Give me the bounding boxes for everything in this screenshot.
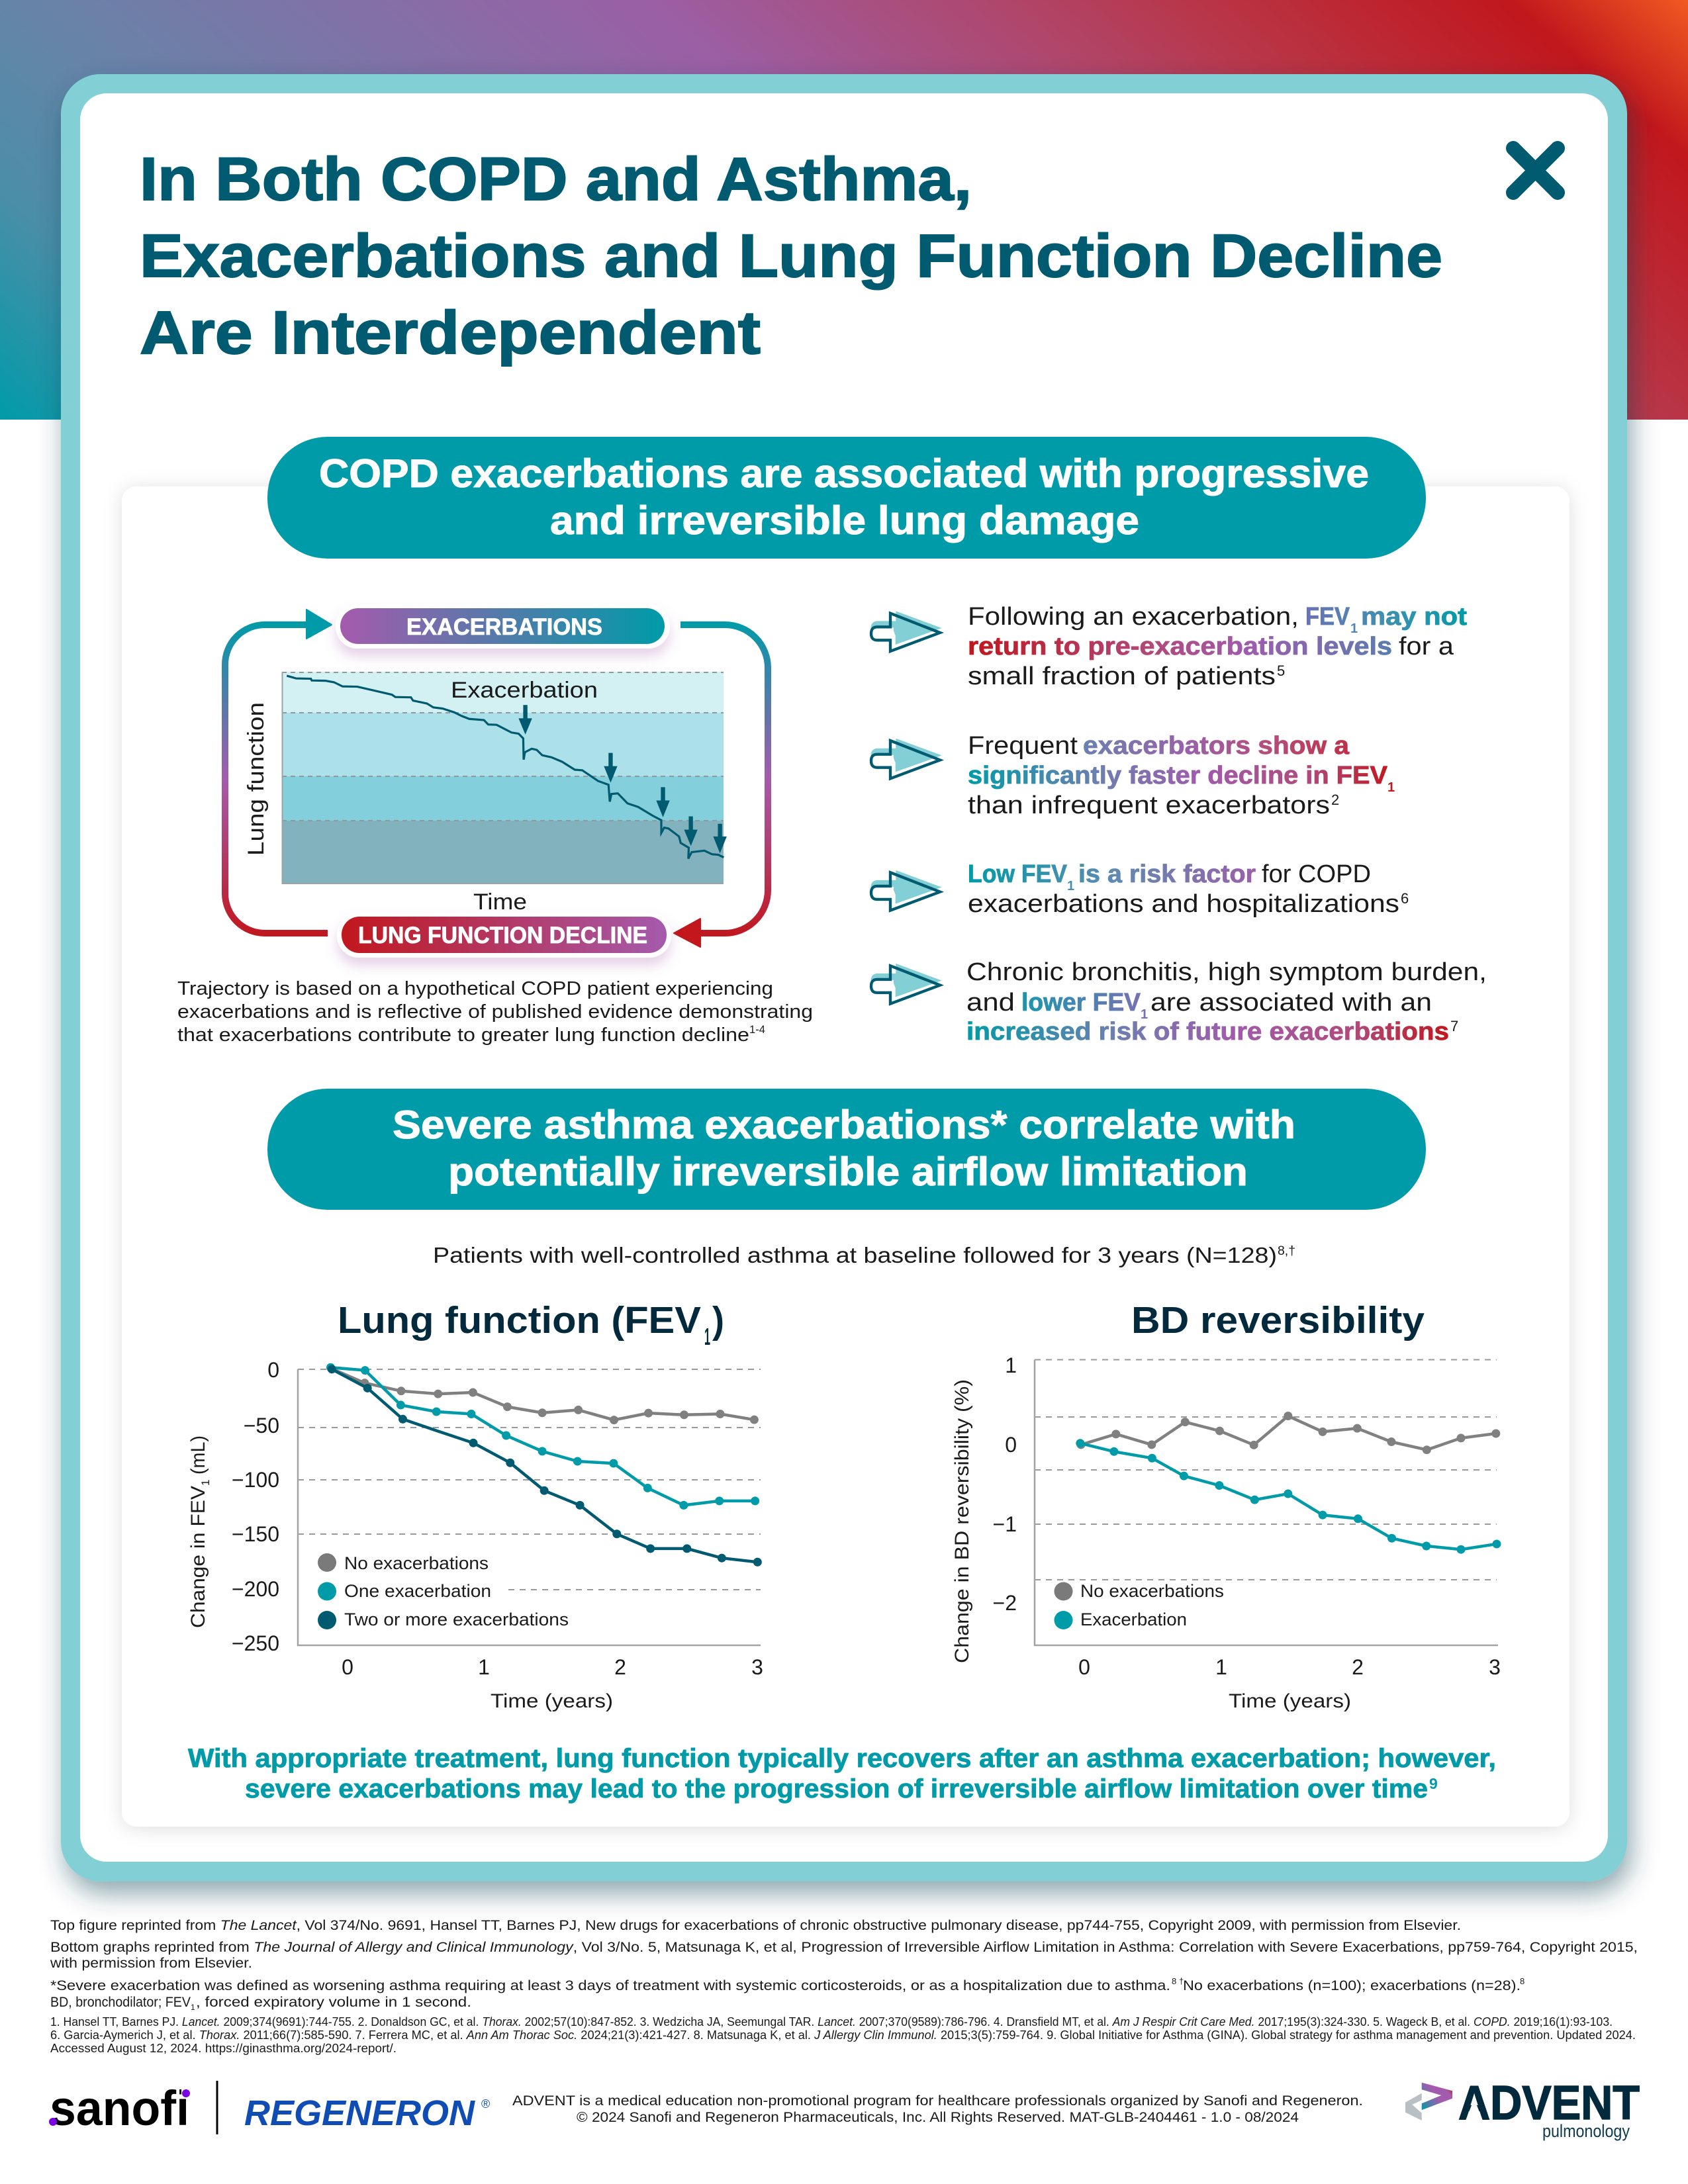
y-axis label: Change in BD reversibility (%) — [951, 1379, 973, 1663]
chart title: 1 — [704, 1323, 710, 1350]
x-axis ticks: 2 — [614, 1655, 626, 1679]
icon: arrow — [871, 870, 942, 911]
series: two or more exacerbations — [328, 1365, 762, 1567]
footnotes: figure credits and definitions: No exacerbations (n=100); exacerbations (n=28). — [1183, 1978, 1521, 1993]
heading pill: asthma: Severe asthma exacerbations* correlate with — [393, 1103, 1295, 1147]
references: 1. Hansel TT, Barnes PJ. Lancet. 2009;374(9691):744-755. 2. Donaldson GC, et al. Thorax. 2002;57(10):847-852. 3. Wedzicha JA, Seemungal TAR. Lancet. 2007;370(9589):786-796. 4. Dransfield MT, et al. Am J Respir Crit Care Med. 2017;195(3):324-330. 5. Wageck B, et al. COPD. 2019;16(1):93-103. — [50, 2015, 1613, 2028]
axes and gridlines — [298, 1369, 761, 1645]
series: exacerbation — [1076, 1439, 1501, 1554]
bullet 3 text: is a risk factor — [1078, 860, 1256, 888]
legend: No exacerbations — [344, 1553, 489, 1573]
divider — [216, 2081, 218, 2134]
bullet 3 — [871, 860, 1409, 918]
inner white card — [80, 93, 1608, 1862]
bullet 4 text: and — [966, 989, 1015, 1017]
y-axis label: 1 — [199, 1480, 212, 1486]
arrow: loop right — [674, 625, 768, 947]
chart: BD reversibility — [951, 1299, 1501, 1712]
icon: arrow — [871, 739, 942, 778]
x-axis ticks: 1 — [478, 1655, 490, 1679]
chart title: ) — [712, 1299, 724, 1342]
bullet 1 text: may not — [1361, 603, 1467, 631]
x-axis ticks: 1 — [1215, 1655, 1227, 1679]
bullet 1 text: 5 — [1277, 662, 1285, 679]
heading pill: COPD: COPD exacerbations are associated with progressive — [319, 451, 1369, 496]
bullet 2 text: 2 — [1331, 792, 1339, 808]
series: no exacerbations — [332, 1369, 759, 1424]
footnotes: figure credits and definitions: † — [1179, 1976, 1184, 1986]
legend: Exacerbation — [1080, 1610, 1187, 1629]
gradient header band — [0, 0, 1688, 420]
subtitle: study population: Patients with well-controlled asthma at baseline followed for 3 years (N=128) — [433, 1243, 1277, 1267]
x-axis ticks: 2 — [1352, 1655, 1364, 1679]
bullet 3 text — [968, 860, 1409, 918]
title: Exacerbations and Lung Function Decline — [140, 222, 1442, 290]
callout: treatment statement — [188, 1744, 1496, 1803]
series: no exacerbations — [1076, 1412, 1500, 1454]
bullet 4 text: Chronic bronchitis, high symptom burden, — [966, 958, 1487, 986]
heading pill: COPD: and irreversible lung damage — [550, 498, 1139, 543]
x-axis ticks — [342, 1655, 763, 1679]
x-axis ticks: 3 — [751, 1655, 763, 1679]
y-axis label: (mL) — [187, 1435, 209, 1475]
bullet 1 — [871, 603, 1467, 690]
caption: trajectory note: 1-4 — [749, 1023, 765, 1036]
footnotes: figure credits and definitions: 8 — [1520, 1976, 1524, 1986]
callout: treatment statement: With appropriate treatment, lung function typically recovers after an asthma exacerbation; however, — [188, 1744, 1496, 1773]
trajectory line with exacerbation arrows — [287, 676, 727, 858]
y-axis ticks — [232, 1358, 279, 1655]
legend — [318, 1553, 569, 1629]
axis label: Time: Time — [473, 889, 527, 915]
pill: EXACERBATIONS — [336, 604, 670, 649]
x-axis ticks: 3 — [1489, 1655, 1501, 1679]
legend: Two or more exacerbations — [344, 1610, 569, 1629]
y-axis label — [187, 1435, 212, 1628]
legend: No exacerbations — [1080, 1581, 1224, 1601]
chart: lung function FEV1 — [187, 1299, 763, 1712]
bullet 4 text — [966, 958, 1487, 1046]
logo: Regeneron: REGENERON — [244, 2093, 475, 2133]
program disclaimer — [512, 2093, 1363, 2125]
y-axis ticks — [993, 1353, 1017, 1615]
footnotes: figure credits and definitions: 1 — [191, 2003, 195, 2012]
footnotes: figure credits and definitions: , forced expiratory volume in 1 second. — [196, 1995, 471, 2010]
bullet 3 text: exacerbations and hospitalizations — [968, 890, 1399, 918]
y-axis label: Change in FEV — [187, 1486, 209, 1628]
legend — [1054, 1581, 1224, 1629]
bullet 4 — [871, 958, 1487, 1046]
logo: ADVENT pulmonology: pulmonology — [1542, 2121, 1630, 2141]
y-axis ticks: −1 — [993, 1512, 1017, 1536]
diagram: exacerbation and lung function decline cycle — [225, 604, 768, 958]
footnotes: figure credits and definitions: BD, bronchodilator; FEV — [50, 1995, 191, 2010]
footnotes: figure credits and definitions: Top figure reprinted from The Lancet , Vol 374/No. 9691, Hansel TT, Barnes PJ, New drugs for exacerbations of chronic obstructive pulmonary disease, pp744-755, Copyright 2009, with permission from Elsevier. — [50, 1918, 1461, 1933]
caption: trajectory note — [177, 978, 813, 1046]
callout: treatment statement: 9 — [1429, 1775, 1438, 1792]
icon: arrow — [871, 964, 942, 1004]
y-axis ticks: 0 — [1005, 1433, 1017, 1457]
x-axis ticks: 0 — [342, 1655, 353, 1679]
bullet 2 text: Frequent — [968, 732, 1078, 760]
legend: One exacerbation — [344, 1581, 491, 1601]
logo mark — [1405, 2083, 1452, 2120]
bullet 3 text: Low FEV — [968, 860, 1068, 888]
icon: X brand mark — [1513, 148, 1558, 193]
bullet 3 text: for COPD — [1262, 860, 1371, 888]
y-axis ticks: −200 — [232, 1577, 279, 1601]
bullet 4 text: 1 — [1141, 1007, 1148, 1022]
bullet 4 text: increased risk of future exacerbations — [966, 1018, 1449, 1046]
y-axis ticks: −50 — [244, 1414, 279, 1437]
title: Are Interdependent — [140, 299, 761, 367]
pill: EXACERBATIONS: EXACERBATIONS — [406, 614, 602, 640]
bullet 1 text: 1 — [1350, 621, 1358, 636]
series: one exacerbation — [326, 1363, 759, 1510]
bullet 1 text — [968, 603, 1467, 690]
pill: LUNG FUNCTION DECLINE — [337, 913, 671, 958]
y-axis ticks: 1 — [1005, 1353, 1017, 1377]
bullet 4 text: lower FEV — [1021, 989, 1141, 1017]
footnotes: figure credits and definitions: *Severe exacerbation was defined as worsening asthma requiring at least 3 days of treatment with systemic corticosteroids, or as a hospitalization due to asthma. — [50, 1978, 1170, 1993]
subtitle: study population: 8,† — [1278, 1244, 1295, 1258]
y-axis ticks: −150 — [232, 1522, 279, 1546]
bullet 1 text: for a — [1399, 633, 1454, 660]
arrow: loop left — [225, 610, 332, 933]
x-axis ticks — [1078, 1655, 1501, 1679]
logo: ADVENT pulmonology: ADVENT — [1458, 2077, 1640, 2130]
caption: trajectory note: that exacerbations contribute to greater lung function decline — [177, 1024, 749, 1046]
panel: content panel — [122, 486, 1570, 1827]
x-axis ticks: 0 — [1078, 1655, 1090, 1679]
y-axis ticks: −250 — [232, 1631, 279, 1655]
references: 6. Garcia-Aymerich J, et al. Thorax. 2011;66(7):585-590. 7. Ferrera MC, et al. Ann Am Thorac Soc. 2024;21(3):421-427. 8. Matsunaga K, et al. J Allergy Clin Immunol. 2015;3(5):759-764. 9. Global Initiative for Asthma (GINA). Global strategy for asthma management and prevention. Updated 2024. — [50, 2028, 1636, 2042]
callout: treatment statement: severe exacerbations may lead to the progression of irreversible airflow limitation over time — [245, 1774, 1428, 1803]
bullet 2 — [871, 732, 1395, 819]
bullet 3 text: 6 — [1401, 890, 1409, 907]
y-axis ticks: 0 — [267, 1358, 279, 1382]
y-axis ticks: −2 — [993, 1591, 1017, 1615]
icon: arrow — [871, 611, 942, 651]
bullet 2 text: exacerbators show a — [1083, 732, 1350, 760]
axes and gridlines — [1035, 1359, 1498, 1645]
axis label: Lung function: Lung function — [244, 702, 269, 856]
y-axis ticks: −100 — [232, 1468, 279, 1492]
chart: bands — [282, 672, 724, 884]
references: Accessed August 12, 2024. https://ginasthma.org/2024-report/. — [50, 2041, 397, 2055]
bullet 2 text: than infrequent exacerbators — [968, 792, 1330, 819]
chart title: Lung function (FEV — [338, 1299, 701, 1342]
logo: sanofi: sanofi — [50, 2081, 189, 2136]
references — [50, 2015, 1636, 2055]
heading pill: COPD — [267, 437, 1426, 559]
footnotes: figure credits and definitions: 8 — [1172, 1976, 1176, 1986]
footnotes: figure credits and definitions: Bottom graphs reprinted from The Journal of Allergy and Clinical Immunology , Vol 3/No. 5, Matsunaga K, et al, Progression of Irreversible Airflow Limitation in Asthma: Correlation with Severe Exacerbations, pp759-764, Copyright 2015, — [50, 1940, 1638, 1955]
bullet 4 text: 7 — [1450, 1018, 1458, 1034]
footnotes: figure credits and definitions — [50, 1918, 1638, 2012]
bullet 2 text: significantly faster decline in FEV — [968, 762, 1388, 790]
bullet 2 text: 1 — [1387, 780, 1395, 795]
bullet 4 text: are associated with an — [1150, 989, 1432, 1017]
bullet 1 text: FEV — [1305, 603, 1350, 631]
bullet 1 text: return to pre-exacerbation levels — [968, 633, 1392, 660]
pill: LUNG FUNCTION DECLINE: LUNG FUNCTION DECLINE — [358, 923, 647, 948]
heading pill: asthma: potentially irreversible airflow limitation — [448, 1150, 1248, 1194]
bullet 1 text: small fraction of patients — [968, 662, 1276, 690]
bullet 1 text: Following an exacerbation, — [968, 603, 1299, 631]
heading pill: asthma — [267, 1089, 1426, 1210]
caption: trajectory note: Trajectory is based on a hypothetical COPD patient experiencing — [177, 978, 773, 999]
outer card frame — [61, 74, 1627, 1882]
program disclaimer: © 2024 Sanofi and Regeneron Pharmaceuticals, Inc. All Rights Reserved. MAT-GLB-2404461 - 1.0 - 08/2024 — [577, 2110, 1299, 2125]
label: Exacerbation: Exacerbation — [451, 678, 598, 703]
title — [140, 146, 1442, 367]
program disclaimer: ADVENT is a medical education non-promotional program for healthcare professionals organized by Sanofi and Regeneron. — [512, 2093, 1363, 2109]
title: In Both COPD and Asthma, — [140, 146, 972, 213]
x-axis label: Time (years) — [1229, 1690, 1351, 1712]
logo: Regeneron: ® — [481, 2097, 490, 2111]
logo: ADVENT pulmonology — [1405, 2077, 1640, 2141]
caption: trajectory note: exacerbations and is reflective of published evidence demonstrating — [177, 1001, 813, 1023]
chart title: BD reversibility — [1131, 1299, 1425, 1342]
x-axis label: Time (years) — [491, 1690, 613, 1712]
bullet 2 text — [968, 732, 1395, 819]
bullet 3 text: 1 — [1067, 879, 1074, 893]
footnotes: figure credits and definitions: with permission from Elsevier. — [50, 1956, 252, 1971]
